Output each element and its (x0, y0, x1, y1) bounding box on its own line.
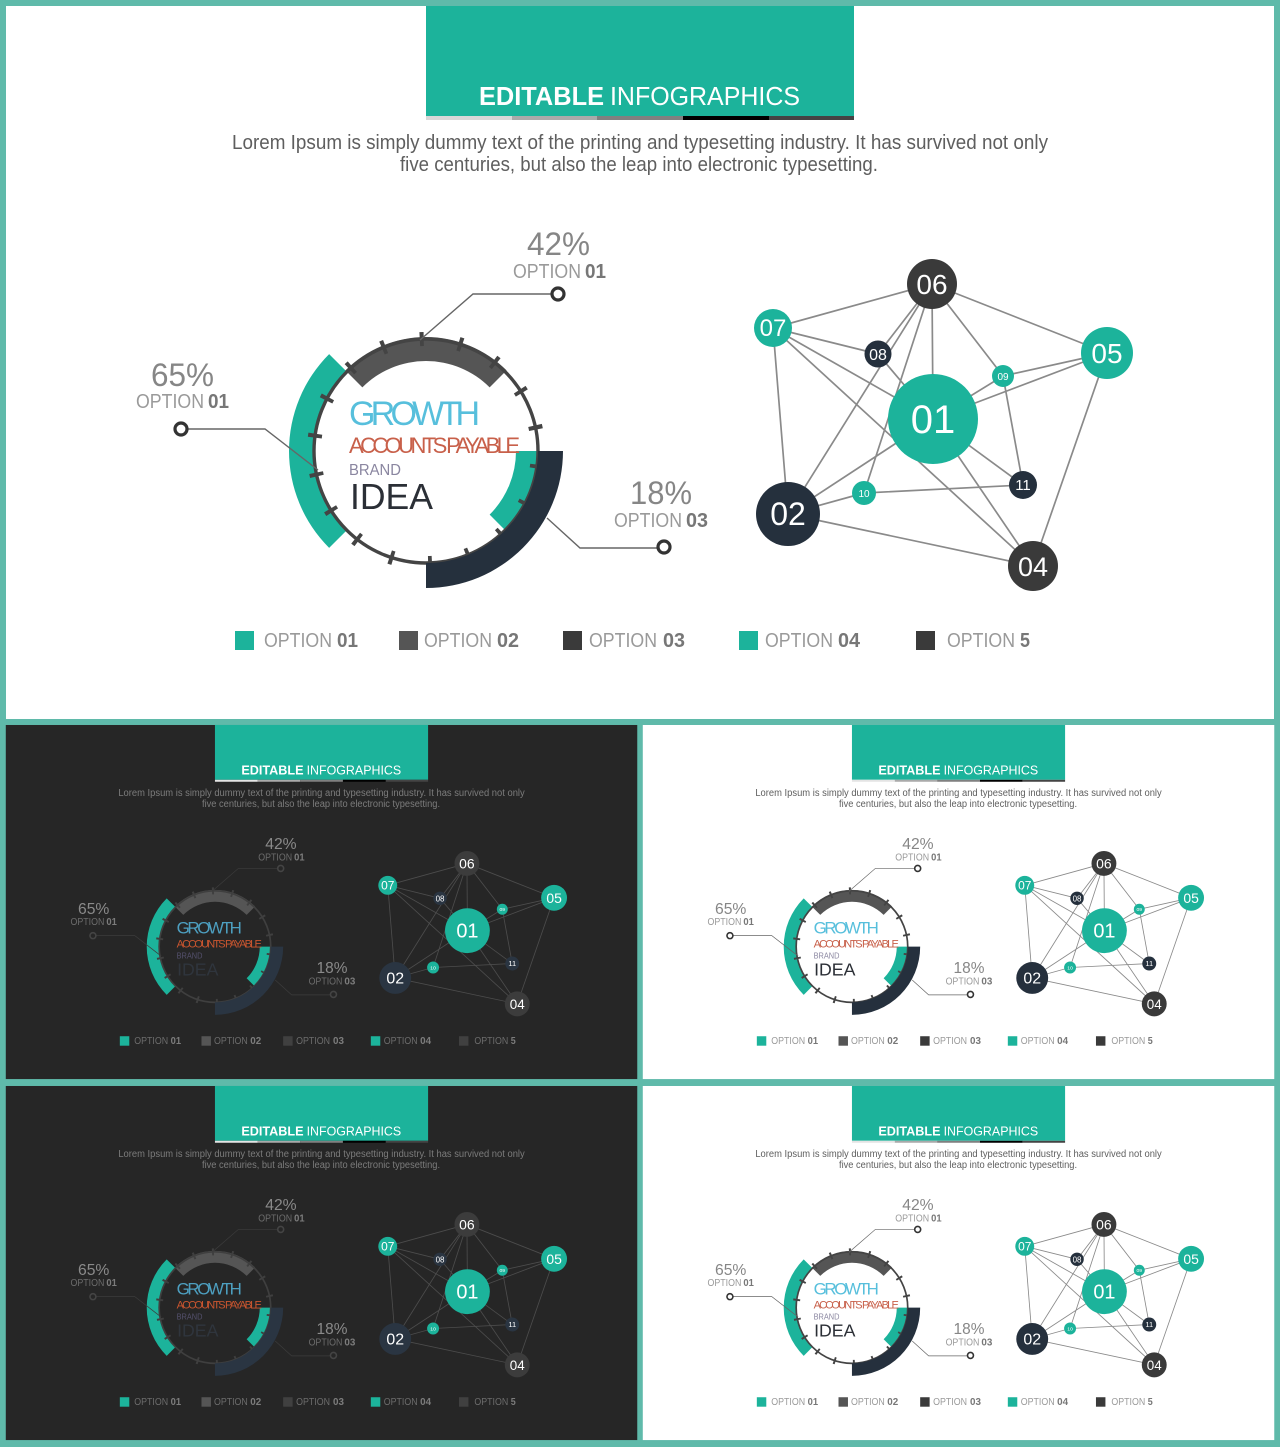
callout: 42% (420, 226, 606, 340)
legend: 5 (511, 1397, 516, 1408)
network diagram: 10 (430, 966, 436, 972)
ring centre text: BRAND (814, 1313, 840, 1322)
network diagram: 02 (1023, 1331, 1041, 1348)
callout: 18%: 03 (981, 1337, 993, 1348)
network diagram: 02 (1023, 970, 1041, 987)
network diagram: 07 (1018, 1239, 1032, 1253)
callout: 65%: OPTION (71, 917, 104, 928)
callout: 42% (849, 1197, 942, 1252)
network diagram: 08 (1073, 894, 1082, 903)
legend: OPTION (771, 1036, 805, 1047)
legend: 5 (1148, 1397, 1153, 1408)
legend: 01 (337, 630, 358, 652)
callout: 18%: 03 (981, 976, 993, 987)
ring chart (784, 880, 920, 1015)
title: INFOGRAPHICS (307, 762, 402, 777)
callout: 65%: OPTION (708, 1278, 741, 1289)
header banner (215, 725, 428, 782)
callout: 65%: 01 (106, 917, 117, 928)
network diagram: 04 (1147, 997, 1162, 1012)
callout: 42%: OPTION (513, 261, 581, 283)
ring centre text (349, 395, 520, 517)
callout: 18%: OPTION (614, 510, 682, 532)
callout: 18%: OPTION (946, 1337, 979, 1348)
callout: 65% (708, 1262, 798, 1317)
legend: OPTION (1111, 1397, 1145, 1408)
callout: 18% (912, 1321, 993, 1358)
network diagram: 01 (1093, 921, 1116, 943)
legend: OPTION (296, 1397, 330, 1408)
title: EDITABLE (878, 1123, 941, 1138)
callout: 18%: 03 (686, 510, 708, 532)
network diagram: 06 (459, 855, 475, 871)
intro text: Lorem Ipsum is simply dummy text of the printing and typesetting industry. It has survived not only (755, 1149, 1162, 1160)
panel: light slide, row 2 (643, 1086, 1274, 1440)
network diagram (1015, 851, 1204, 1016)
callout: 42%: 42% (902, 1197, 934, 1214)
panel: dark slide, row 2 (6, 1086, 637, 1440)
ring centre text: GROWTH (814, 919, 879, 938)
callout: 65%: 65% (715, 901, 746, 918)
legend: 02 (497, 630, 519, 652)
ring centre text: IDEA (350, 476, 433, 517)
panel: main light slide (6, 6, 1274, 719)
ring centre text: ACCOUNTS PAYABLE (814, 1300, 899, 1312)
legend: 04 (838, 630, 861, 652)
title: INFOGRAPHICS (610, 81, 800, 111)
network diagram: 10 (858, 489, 870, 500)
panel: dark slide, row 1 (6, 725, 637, 1079)
title: EDITABLE (241, 1123, 304, 1138)
network diagram (754, 259, 1133, 591)
callout: 42%: 01 (931, 852, 942, 863)
callout: 42% (212, 836, 305, 891)
network diagram: 11 (508, 1320, 516, 1329)
intro text (232, 132, 1048, 176)
title: EDITABLE (479, 81, 604, 111)
legend: 01 (171, 1036, 182, 1047)
network diagram: 05 (546, 890, 562, 906)
callout: 65% (71, 901, 161, 956)
callout: 42%: 01 (931, 1213, 942, 1224)
network diagram: 07 (1018, 878, 1032, 892)
header banner (852, 1086, 1065, 1143)
ring centre text: GROWTH (814, 1280, 879, 1299)
callout: 18%: 18% (630, 475, 692, 511)
ring centre text: BRAND (814, 952, 840, 961)
ring centre text: BRAND (177, 952, 203, 961)
legend: OPTION (384, 1036, 418, 1047)
callout: 42%: 42% (265, 1197, 297, 1214)
ring centre text (814, 1280, 899, 1340)
header banner (852, 725, 1065, 782)
network diagram: 11 (1145, 959, 1153, 968)
network diagram: 04 (510, 997, 525, 1012)
callout: 42%: 42% (902, 836, 934, 853)
network diagram: 11 (1145, 1320, 1153, 1329)
network diagram: 04 (1147, 1358, 1162, 1373)
legend: OPTION (1021, 1036, 1055, 1047)
intro text: Lorem Ipsum is simply dummy text of the printing and typesetting industry. It has survived not only (118, 788, 525, 799)
legend: 04 (420, 1397, 432, 1408)
callout: 42% (849, 836, 942, 891)
callout: 65% (708, 901, 798, 956)
callout: 65%: 01 (743, 917, 754, 928)
legend: 03 (333, 1036, 344, 1047)
network diagram: 06 (1096, 855, 1112, 871)
legend: OPTION (851, 1397, 885, 1408)
network diagram: 01 (911, 398, 955, 442)
callout: 18%: 18% (317, 1321, 347, 1338)
legend: OPTION (933, 1397, 967, 1408)
ring centre text: ACCOUNTS PAYABLE (177, 939, 262, 951)
ring centre text: GROWTH (177, 1280, 242, 1299)
intro text (118, 1149, 525, 1171)
callout: 65% (136, 357, 318, 470)
title: INFOGRAPHICS (307, 1123, 402, 1138)
callout: 18%: 03 (344, 1337, 356, 1348)
title: INFOGRAPHICS (944, 762, 1039, 777)
callout: 18% (547, 475, 708, 553)
panel background (6, 1086, 637, 1440)
callout: 18% (275, 960, 356, 997)
ring centre text: BRAND (349, 462, 401, 479)
network diagram: 05 (546, 1251, 562, 1267)
network diagram: 02 (386, 970, 404, 987)
network diagram (378, 1212, 567, 1377)
callout: 65%: OPTION (136, 391, 204, 413)
legend: 5 (511, 1036, 516, 1047)
legend: OPTION (765, 630, 833, 652)
network diagram: 01 (456, 1282, 479, 1304)
callout: 65%: 65% (78, 1262, 109, 1279)
callout: 18% (912, 960, 993, 997)
network diagram: 02 (386, 1331, 404, 1348)
legend: 01 (808, 1397, 819, 1408)
intro text: Lorem Ipsum is simply dummy text of the printing and typesetting industry. It has survived not only (118, 1149, 525, 1160)
intro text: five centuries, but also the leap into electronic typesetting. (202, 1160, 440, 1171)
legend: OPTION (1021, 1397, 1055, 1408)
network diagram: 09 (500, 907, 505, 913)
callout: 42%: OPTION (258, 1213, 292, 1224)
ring centre text (177, 919, 262, 979)
header banner (215, 1086, 428, 1143)
ring centre text: GROWTH (177, 919, 242, 938)
network diagram: 01 (1093, 1282, 1116, 1304)
legend: 03 (333, 1397, 344, 1408)
callout: 18%: OPTION (309, 976, 342, 987)
intro text (755, 1149, 1162, 1171)
network diagram: 06 (459, 1216, 475, 1232)
title: EDITABLE (241, 762, 304, 777)
network diagram: 10 (430, 1327, 436, 1333)
network diagram: 04 (510, 1358, 525, 1373)
callout: 42%: 01 (294, 852, 305, 863)
intro text: five centuries, but also the leap into electronic typesetting. (839, 799, 1077, 810)
legend: OPTION (296, 1036, 330, 1047)
panel background (643, 725, 1274, 1079)
ring centre text: ACCOUNTS PAYABLE (349, 433, 520, 458)
callout: 42%: OPTION (895, 1213, 929, 1224)
ring chart (784, 1241, 920, 1376)
callout: 18% (275, 1321, 356, 1358)
legend: OPTION (214, 1397, 248, 1408)
network diagram: 06 (1096, 1216, 1112, 1232)
network diagram: 07 (381, 1239, 395, 1253)
legend: 5 (1148, 1036, 1153, 1047)
network diagram: 05 (1091, 338, 1123, 369)
legend: OPTION (134, 1036, 168, 1047)
legend (120, 1397, 516, 1408)
legend: OPTION (214, 1036, 248, 1047)
network diagram (378, 851, 567, 1016)
legend: OPTION (947, 630, 1015, 652)
callout: 65%: 65% (151, 357, 214, 393)
legend: OPTION (589, 630, 657, 652)
ring centre text (177, 1280, 262, 1340)
legend: OPTION (474, 1036, 508, 1047)
callout: 42%: 42% (265, 836, 297, 853)
legend: OPTION (384, 1397, 418, 1408)
callout: 42% (212, 1197, 305, 1252)
callout: 65%: 01 (106, 1278, 117, 1289)
network diagram: 05 (1183, 1251, 1199, 1267)
legend: 5 (1020, 630, 1030, 652)
legend: 02 (887, 1036, 899, 1047)
title: INFOGRAPHICS (944, 1123, 1039, 1138)
network diagram: 07 (381, 878, 395, 892)
legend: 02 (250, 1036, 262, 1047)
callout: 18%: OPTION (309, 1337, 342, 1348)
panel background (643, 1086, 1274, 1440)
ring centre text: IDEA (814, 1320, 855, 1340)
legend (757, 1397, 1153, 1408)
network diagram: 07 (760, 315, 786, 342)
callout: 42%: OPTION (895, 852, 929, 863)
intro text (755, 788, 1162, 810)
network diagram: 09 (1137, 907, 1142, 913)
intro text (118, 788, 525, 810)
callout: 42%: OPTION (258, 852, 292, 863)
legend: OPTION (1111, 1036, 1145, 1047)
legend: 01 (171, 1397, 182, 1408)
callout: 42%: 01 (585, 261, 606, 283)
legend: 04 (1057, 1036, 1069, 1047)
ring centre text: ACCOUNTS PAYABLE (177, 1300, 262, 1312)
callout: 65%: 65% (715, 1262, 746, 1279)
legend (120, 1036, 516, 1047)
callout: 18%: 18% (317, 960, 347, 977)
panel background (6, 6, 1274, 719)
legend (235, 630, 1030, 652)
network diagram: 11 (508, 959, 516, 968)
network diagram: 08 (869, 347, 887, 364)
callout: 18%: 03 (344, 976, 356, 987)
legend: 03 (970, 1036, 981, 1047)
network diagram: 08 (436, 894, 445, 903)
panel: light slide, row 1 (643, 725, 1274, 1079)
callout: 65% (71, 1262, 161, 1317)
intro text: Lorem Ipsum is simply dummy text of the printing and typesetting industry. It has survived not only (232, 132, 1048, 154)
ring centre text: IDEA (177, 1320, 218, 1340)
callout: 18%: 18% (954, 1321, 984, 1338)
ring chart (147, 880, 283, 1015)
title: EDITABLE (878, 762, 941, 777)
callout: 65%: 65% (78, 901, 109, 918)
legend: OPTION (134, 1397, 168, 1408)
network diagram: 08 (1073, 1255, 1082, 1264)
legend: OPTION (474, 1397, 508, 1408)
legend: OPTION (264, 630, 332, 652)
network diagram: 02 (770, 496, 806, 532)
ring chart (289, 318, 563, 588)
legend: 03 (970, 1397, 981, 1408)
intro text: Lorem Ipsum is simply dummy text of the printing and typesetting industry. It has survived not only (755, 788, 1162, 799)
network diagram: 09 (500, 1268, 505, 1274)
callout: 65%: OPTION (708, 917, 741, 928)
network diagram: 04 (1018, 552, 1048, 582)
ring chart (147, 1241, 283, 1376)
callout: 18%: OPTION (946, 976, 979, 987)
intro text: five centuries, but also the leap into electronic typesetting. (400, 154, 878, 176)
intro text: five centuries, but also the leap into electronic typesetting. (839, 1160, 1077, 1171)
legend: 01 (808, 1036, 819, 1047)
legend (757, 1036, 1153, 1047)
network diagram: 05 (1183, 890, 1199, 906)
ring centre text: BRAND (177, 1313, 203, 1322)
ring centre text (814, 919, 899, 979)
legend: 02 (250, 1397, 262, 1408)
callout: 65%: 01 (208, 391, 229, 413)
ring centre text: ACCOUNTS PAYABLE (814, 939, 899, 951)
ring centre text: GROWTH (349, 395, 480, 433)
network diagram: 11 (1015, 477, 1031, 494)
legend: OPTION (851, 1036, 885, 1047)
callout: 42%: 01 (294, 1213, 305, 1224)
panel background (6, 725, 637, 1079)
ring centre text: IDEA (177, 959, 218, 979)
network diagram (1015, 1212, 1204, 1377)
intro text: five centuries, but also the leap into electronic typesetting. (202, 799, 440, 810)
network diagram: 10 (1067, 1327, 1073, 1333)
network diagram: 09 (1137, 1268, 1142, 1274)
ring centre text: IDEA (814, 959, 855, 979)
network diagram: 01 (456, 921, 479, 943)
header banner (426, 6, 854, 120)
legend: 04 (420, 1036, 432, 1047)
callout: 18%: 18% (954, 960, 984, 977)
legend: 02 (887, 1397, 899, 1408)
legend: 03 (663, 630, 685, 652)
callout: 42%: 42% (527, 226, 590, 262)
callout: 65%: OPTION (71, 1278, 104, 1289)
network diagram: 09 (997, 372, 1009, 383)
network diagram: 10 (1067, 966, 1073, 972)
legend: 04 (1057, 1397, 1069, 1408)
legend: OPTION (771, 1397, 805, 1408)
legend: OPTION (424, 630, 492, 652)
network diagram: 06 (916, 269, 948, 300)
legend: OPTION (933, 1036, 967, 1047)
callout: 65%: 01 (743, 1278, 754, 1289)
network diagram: 08 (436, 1255, 445, 1264)
